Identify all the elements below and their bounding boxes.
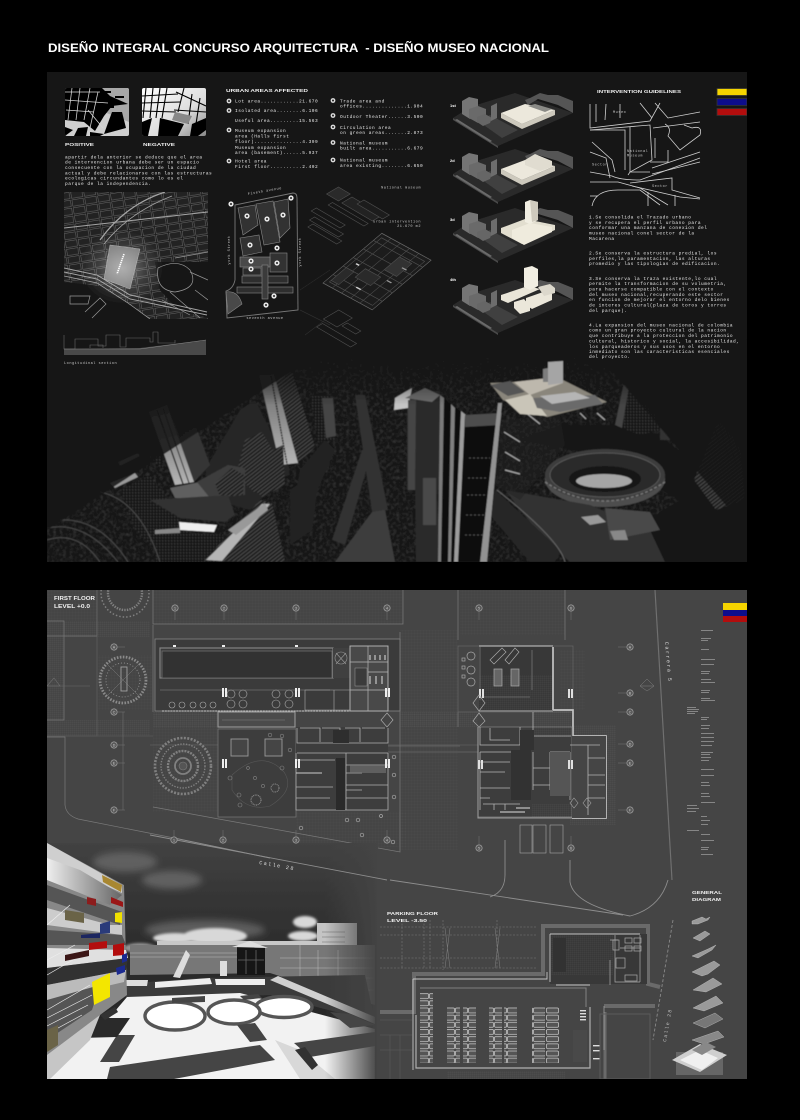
text block: guidelines: 4.La expansion del museo nacional de colombia <box>589 322 733 328</box>
text block: guidelines: 2.Se conserva la estructura predial, los <box>589 250 717 256</box>
text block: site conclusion: parque de la independencia. <box>65 181 151 187</box>
dark tree masses <box>544 425 746 562</box>
massing diagram 3: 3d <box>450 217 455 222</box>
massing diagram 4 <box>450 266 573 335</box>
text block: guidelines: del parque). <box>589 308 627 314</box>
background block buildings <box>156 456 164 470</box>
table: area figures right: National museum <box>340 158 388 164</box>
site plan <box>226 186 303 321</box>
text block: site conclusion <box>65 154 212 187</box>
text block: guidelines: del museo nacional,recuperando este sector <box>589 292 723 298</box>
heading: general diagram: GENERAL <box>692 890 722 895</box>
text block: site conclusion: ecologicas circundantes como lo es el <box>65 176 183 182</box>
table: area figures left: Hotel area <box>235 159 267 165</box>
axis markers top and bottom: 4 <box>386 606 388 610</box>
plan: south museum wing <box>222 713 396 844</box>
text block: guidelines: en funcion de mejorar el entorno delo bienes <box>589 297 730 303</box>
axis markers right: D <box>629 742 632 746</box>
axis markers top and bottom: 4 <box>386 838 388 842</box>
axis markers top and bottom: 3 <box>295 838 297 842</box>
axis markers top and bottom: 1 <box>173 838 175 842</box>
table: area figures left: Useful area.........15.563 <box>235 118 318 124</box>
clouds <box>93 852 265 940</box>
label: negative: NEGATIVE <box>143 142 175 147</box>
axis markers top and bottom: 6 <box>570 606 572 610</box>
axis markers left <box>111 644 125 813</box>
table: area figures left: First floor..........2.402 <box>235 164 318 170</box>
table: area figures right: on green areas.......2.873 <box>340 130 423 136</box>
map annotations: Museo <box>613 111 626 115</box>
text block: guidelines: como un gran proyecto cultural de la nacion <box>589 328 727 334</box>
axis markers top and bottom: 2 <box>223 606 225 610</box>
label: Calle 28 vertical: Calle 28 <box>662 1008 674 1042</box>
text block: guidelines: de interes cultural(plaza de toros y torres <box>589 302 727 308</box>
heading: parking floor <box>387 911 439 923</box>
axis markers right: B <box>629 691 632 695</box>
text block: site conclusion: apartir dela anterior se deduce que el area <box>65 154 203 160</box>
map annotations: Sector <box>592 162 608 168</box>
left facade with colour panels <box>47 843 127 1079</box>
table: area figures right: offices..............1.904 <box>340 104 423 110</box>
mid plinths <box>110 975 375 1022</box>
podium buildings <box>170 482 210 500</box>
mandala: west garden with ramp <box>100 657 146 703</box>
text block: guidelines: promedio y las tipologias de edificacion. <box>589 261 720 267</box>
panel: floor plans sheet <box>47 569 747 1079</box>
axis markers top and bottom <box>171 605 574 851</box>
car stalls <box>420 993 559 1063</box>
text block: site conclusion: de intervencion urbana debe ser un espacio <box>65 160 199 166</box>
map: negative figure-ground <box>142 88 206 136</box>
label: longitudinal section: Longitudinal section <box>64 361 117 366</box>
road corridor <box>355 395 388 512</box>
table: area figures left: Lot area............21.670 <box>235 98 318 104</box>
table: area figures left: area (basement)......5.937 <box>235 150 318 156</box>
text block: guidelines: conformar una manzana de conexion del <box>589 225 707 231</box>
axis markers right: F <box>629 808 632 812</box>
numbered markers <box>228 195 294 308</box>
text block: site conclusion: actual y debe relacionarse con las estructuras <box>65 170 212 176</box>
text block: guidelines: museo nacional conel sector de la <box>589 230 695 236</box>
right fade into plan <box>325 843 378 1079</box>
table: area figures right: area existing........6.650 <box>340 163 423 169</box>
site plan: seventh avenue <box>246 316 284 321</box>
table: area figures left: floor)...............4.399 <box>235 139 318 145</box>
heading: urban areas affected: URBAN AREAS AFFECTED <box>226 88 309 94</box>
massing diagram 4: 4th <box>450 277 457 282</box>
ground by bullring <box>505 490 665 562</box>
mandala: central garden <box>155 738 211 794</box>
plan: north museum wing <box>155 639 400 711</box>
axonometric museum diagram <box>289 186 431 347</box>
site grids and paving <box>47 590 616 852</box>
dark slabs <box>79 994 375 1079</box>
axis markers right <box>618 644 654 813</box>
map: intervention road lines <box>590 103 701 206</box>
plan: parking floor <box>380 920 660 1079</box>
exploded general diagram stack <box>672 917 727 1075</box>
flag of Colombia <box>717 88 747 116</box>
table: area figures left: Museum expansion <box>235 128 286 134</box>
axis markers left: C <box>113 710 116 714</box>
table: area figures left <box>227 98 318 170</box>
label: Calle 28 street: Calle 28 <box>259 860 295 872</box>
highway <box>47 492 160 562</box>
axis markers top and bottom: 5 <box>478 846 480 850</box>
park and highway dark zones <box>155 262 208 318</box>
table: area figures right: Trade area and <box>340 98 385 104</box>
text block: guidelines: inmediato son las caracteristicas esenciales <box>589 349 730 355</box>
museum model in photo <box>490 380 607 417</box>
text block: guidelines <box>589 214 739 360</box>
tower A faces <box>180 432 210 482</box>
site plan: york Street <box>298 237 303 267</box>
heading: general diagram <box>692 890 722 902</box>
massing diagram 2: 2d <box>450 158 455 163</box>
text block: guidelines: para hacerse compatible con el contexto <box>589 286 714 292</box>
panel: urban analysis sheet <box>47 72 747 562</box>
site plan: Fiveth avenue <box>247 186 282 197</box>
text block: guidelines: del proyecto. <box>589 354 631 360</box>
label: positive: POSITIVE <box>65 142 94 147</box>
street of lit buses <box>495 415 565 500</box>
massing diagram 1: 1st <box>450 103 456 108</box>
table: area figures right: Outdoor Theater......3.500 <box>340 114 423 120</box>
mandala: top garden <box>101 569 149 617</box>
distant bridge and buildings <box>157 941 317 948</box>
heading: intervention guidelines: INTERVENTION GUIDELINES <box>597 89 682 95</box>
heading: first floor: FIRST FLOOR <box>54 596 95 602</box>
map: positive figure-ground <box>65 88 129 136</box>
text block: guidelines: y se recupera el perfil urbano para <box>589 220 701 226</box>
map annotations: Sector <box>652 184 668 189</box>
bullring <box>544 478 666 508</box>
perspective render: museum plaza <box>47 843 378 1079</box>
map annotations: National <box>627 149 648 154</box>
tower B faces <box>276 374 315 461</box>
axis markers top and bottom: 5 <box>478 606 480 610</box>
massing diagram 1 <box>450 93 573 148</box>
table: area figures right <box>331 98 423 169</box>
table: area figures left: area (Halls first <box>235 133 289 139</box>
label: intervention area: 21.670 m2 <box>397 225 421 229</box>
axis markers left: D <box>113 743 116 747</box>
text block: guidelines: 1.Se consolida el Trazado urbano <box>589 214 691 220</box>
heading: parking floor: PARKING FLOOR <box>387 911 439 916</box>
table: area figures left: Museum expansion <box>235 145 286 151</box>
axis markers top and bottom: 2 <box>222 838 224 842</box>
plaza floor <box>47 993 375 1079</box>
plan: entrance bar and courtyard <box>218 712 296 817</box>
axis markers top and bottom: 1 <box>174 606 176 610</box>
label: urban intervention: urban intervention <box>373 220 421 224</box>
right towers <box>624 394 660 434</box>
axis markers right: A <box>629 645 632 649</box>
map: urban context with site highlighted <box>64 192 208 319</box>
heading: general diagram: DIAGRAM <box>692 897 721 902</box>
fade overlays <box>262 340 747 404</box>
text block: guidelines: Macarena <box>589 236 615 242</box>
map annotations: Museum <box>627 154 643 158</box>
text block: guidelines: 3.Se conserva la traza existente,lo cual <box>589 276 717 282</box>
label: Carrera 5 street: Carrera 5 <box>663 642 673 683</box>
north marker and triangle <box>47 678 90 686</box>
text block: site conclusion: consecuente con la ocupacion de la ciudad <box>65 165 196 171</box>
table: area figures right: Circulation area <box>340 125 391 131</box>
axis markers left: A <box>113 645 116 649</box>
title: DISEÑO INTEGRAL CONCURSO ARQUITECTURA - DISEÑO MUSEO NACIONAL <box>48 40 550 55</box>
table: area figures right: built area...........6.679 <box>340 146 423 152</box>
heading: first floor <box>54 596 95 610</box>
aerial city photograph <box>47 340 747 562</box>
text block: guidelines: que contribuye a la proteccion del patrimonio <box>589 333 733 339</box>
museum site <box>104 245 140 289</box>
plan: east building <box>478 711 606 853</box>
text block: guidelines: permite la transformacion de su volumetria, <box>589 281 727 287</box>
plan: north east pavilion <box>458 646 606 818</box>
map annotations <box>592 111 668 189</box>
bright rooftops left <box>110 473 138 488</box>
table: area figures right: National museum <box>340 140 388 146</box>
axis markers top and bottom: 6 <box>570 846 572 850</box>
axis markers right: E <box>629 761 632 765</box>
axis markers left: F <box>113 808 116 812</box>
street lines <box>150 590 673 1040</box>
table: area figures left: Isolated area........6.106 <box>235 108 318 114</box>
text block: guidelines: perfiles,la paramentacion, las alturas <box>589 256 711 262</box>
twin tower and left annex <box>407 391 440 490</box>
plaza rings <box>256 996 312 1018</box>
axis markers top and bottom: 3 <box>295 606 297 610</box>
massing diagram 3 <box>450 200 573 263</box>
text block: guidelines: cultural, historico y social, la accesibilidad, <box>589 338 739 344</box>
axis markers right: C <box>629 710 632 714</box>
site plan: york Street <box>227 235 232 265</box>
second flag of Colombia <box>723 603 747 622</box>
heading: parking floor: LEVEL -3.50 <box>387 918 428 923</box>
axis markers left: E <box>113 761 116 765</box>
heading: first floor: LEVEL +0.0 <box>54 604 90 610</box>
massing diagram 2 <box>450 149 573 204</box>
label: national museum: National museum <box>381 186 421 190</box>
room schedule list (illegible in source, drawn as text strokes) <box>687 630 715 855</box>
longitudinal section <box>64 332 206 355</box>
text block: guidelines: los parqueaderos y sus usos en el entorno <box>589 344 720 350</box>
